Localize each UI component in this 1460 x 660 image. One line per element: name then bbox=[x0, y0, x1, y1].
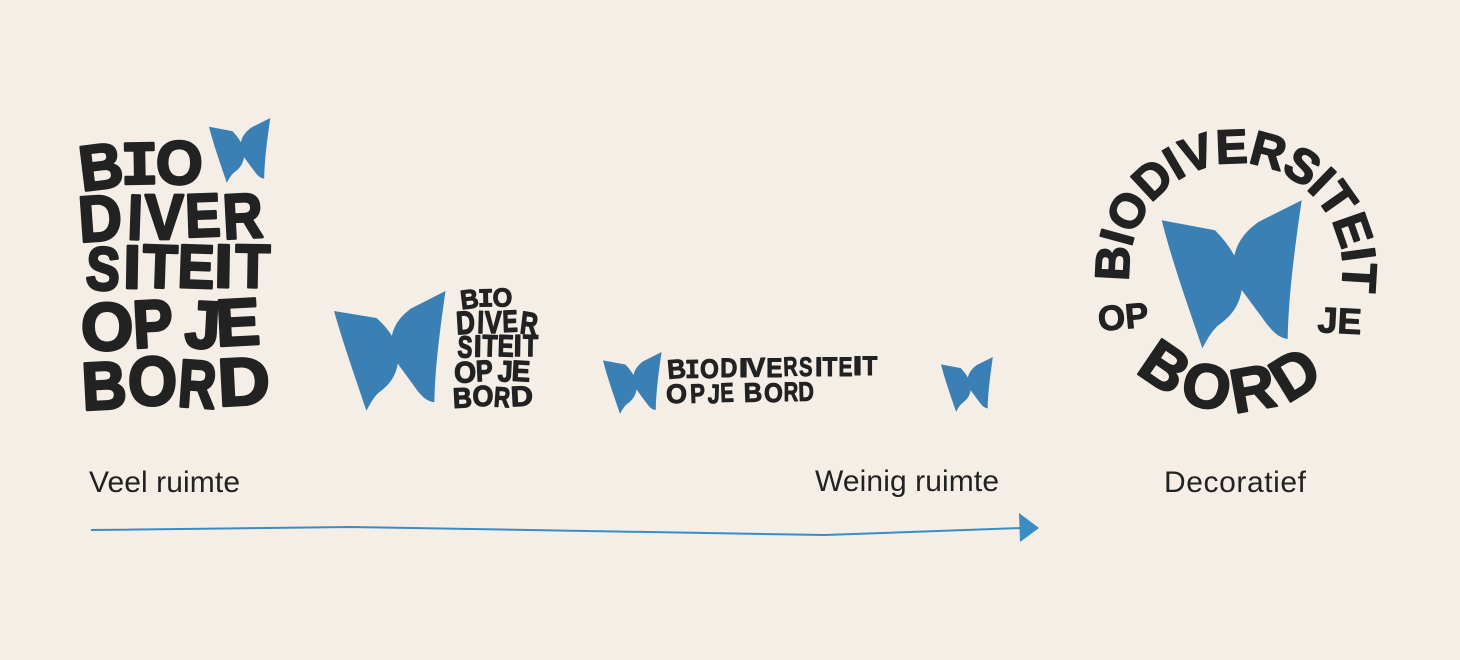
wordmark: stacked large: D bbox=[76, 181, 124, 256]
icon: butterfly only bbox=[941, 357, 993, 412]
wordmark: stacked large: O bbox=[128, 343, 177, 420]
wordmark: two lines: O bbox=[666, 379, 687, 409]
label: Weinig ruimte: Weinig ruimte bbox=[815, 465, 999, 498]
wordmark: two lines: B bbox=[743, 377, 763, 408]
wordmark: stacked large: D bbox=[216, 343, 272, 420]
wordmark: stacked large: B bbox=[80, 347, 128, 425]
wordmark: stacked large: R bbox=[221, 179, 265, 253]
wordmark: two lines: O bbox=[764, 379, 783, 408]
wordmark: two lines: T bbox=[862, 352, 878, 381]
wordmark: stacked medium: O bbox=[454, 357, 476, 389]
wordmark: stacked large: S bbox=[84, 234, 122, 304]
wordmark: two lines: D bbox=[798, 377, 814, 408]
wordmark: two lines: B bbox=[666, 353, 687, 385]
wordmark: stacked medium: S bbox=[457, 330, 473, 365]
wordmark: stacked large: O bbox=[156, 128, 203, 197]
wordmark: stacked medium: D bbox=[510, 380, 534, 413]
wordmark: stacked medium: E bbox=[497, 328, 514, 363]
arrow: from much space to little space bbox=[91, 513, 1039, 542]
wordmark: two lines: R bbox=[783, 353, 798, 383]
wordmark: circular top arc: BIODIVERSITEIT bbox=[1094, 128, 1378, 294]
label: Decoratief: Decoratief bbox=[1164, 466, 1307, 499]
wordmark: stacked large: O bbox=[81, 290, 133, 365]
wordmark: stacked medium: J bbox=[497, 355, 513, 388]
wordmark: stacked medium: B bbox=[452, 381, 473, 414]
icon: butterfly large stacked bbox=[209, 118, 270, 183]
wordmark: stacked medium: I bbox=[478, 285, 494, 314]
logo: butterfly left, stacked text right bbox=[334, 283, 540, 414]
wordmark: stacked large: J bbox=[183, 286, 222, 363]
wordmark: stacked large: E bbox=[177, 232, 216, 302]
wordmark: stacked medium: E bbox=[502, 304, 518, 339]
wordmark: stacked medium: B bbox=[459, 283, 480, 316]
wordmark: two lines: T bbox=[822, 353, 838, 382]
wordmark: stacked medium: E bbox=[511, 355, 531, 389]
wordmark: circular bottom arc: BORD bbox=[1136, 338, 1316, 414]
wordmark: stacked medium: I bbox=[513, 329, 522, 363]
wordmark: stacked large: T bbox=[235, 231, 271, 301]
wordmark: two lines: I bbox=[685, 355, 700, 386]
wordmark: stacked large: I bbox=[127, 182, 144, 254]
wordmark: stacked large: I bbox=[123, 234, 141, 302]
wordmark: two lines: V bbox=[746, 352, 767, 383]
wordmark: stacked medium: O bbox=[473, 380, 493, 412]
logo: stacked, large bbox=[75, 118, 272, 425]
wordmark: stacked large: T bbox=[142, 231, 179, 302]
logo: butterfly left, two-line text bbox=[603, 351, 878, 414]
wordmark: stacked large: E bbox=[184, 181, 222, 251]
wordmark: stacked medium: I bbox=[477, 305, 484, 340]
wordmark: two lines: R bbox=[784, 377, 798, 408]
wordmark: two lines: E bbox=[720, 378, 734, 409]
wordmark: stacked medium: I bbox=[474, 330, 482, 364]
wordmark: two lines: E bbox=[838, 353, 853, 383]
wordmark: two lines: P bbox=[690, 380, 706, 410]
label: Veel ruimte: Veel ruimte bbox=[89, 466, 240, 499]
logo: circular decorative bbox=[1094, 128, 1378, 414]
wordmark: stacked medium: O bbox=[493, 284, 512, 313]
wordmark: stacked large: I bbox=[214, 232, 233, 301]
wordmark: stacked medium: T bbox=[523, 329, 538, 363]
wordmark: stacked large: V bbox=[145, 182, 184, 253]
wordmark: two lines: I bbox=[815, 352, 823, 382]
wordmark: two lines: J bbox=[707, 380, 720, 410]
wordmark: two lines: I bbox=[853, 351, 862, 381]
wordmark: stacked medium: D bbox=[455, 304, 476, 342]
wordmark: stacked medium bbox=[452, 283, 540, 414]
wordmark: two lines: O bbox=[700, 355, 719, 384]
wordmark: stacked medium: R bbox=[518, 305, 540, 342]
wordmark: stacked large: B bbox=[75, 130, 127, 205]
wordmark: stacked medium: P bbox=[475, 354, 493, 388]
icon: butterfly small bbox=[603, 352, 662, 414]
wordmark: stacked medium: R bbox=[493, 382, 511, 414]
wordmark: stacked large bbox=[75, 128, 272, 425]
wordmark: two lines: D bbox=[720, 354, 737, 383]
wordmark: two lines bbox=[666, 351, 878, 410]
icon: butterfly medium bbox=[334, 291, 446, 411]
wordmark: stacked medium: V bbox=[485, 305, 502, 341]
wordmark: stacked large: P bbox=[131, 286, 175, 363]
wordmark: stacked medium: T bbox=[482, 329, 498, 363]
wordmark: stacked large: E bbox=[214, 284, 262, 360]
wordmark: OP: OP bbox=[1096, 296, 1150, 339]
icon: butterfly circular bbox=[1162, 200, 1302, 348]
wordmark: two lines: I bbox=[739, 353, 748, 383]
wordmark: two lines: E bbox=[766, 354, 783, 383]
wordmark: JE: JE bbox=[1317, 299, 1363, 342]
wordmark: stacked large: I bbox=[120, 132, 159, 203]
wordmark: stacked large: R bbox=[176, 346, 219, 423]
wordmark: two lines: S bbox=[799, 352, 813, 383]
